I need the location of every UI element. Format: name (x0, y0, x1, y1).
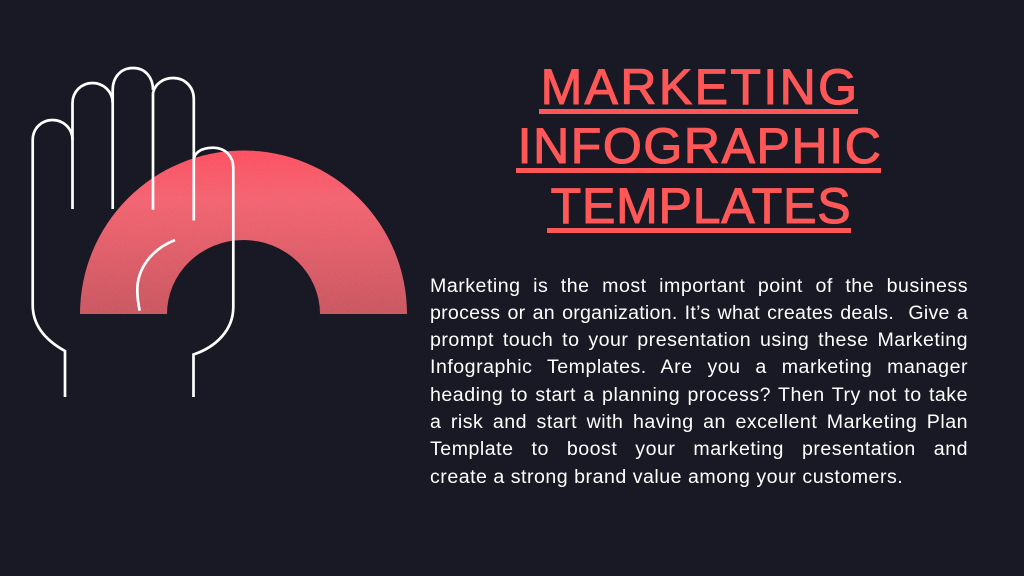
body text: create a strong brand value among your customers. (430, 466, 903, 488)
index finger (153, 78, 194, 220)
title: INFOGRAPHIC (518, 118, 882, 174)
body text: a risk and start with having an excellent Marketing Plan (430, 411, 968, 433)
body text: prompt touch to your presentation using these Marketing (430, 329, 968, 351)
body text: Infographic Templates. Are you a marketing manager (430, 356, 968, 378)
body text: heading to start a planning process? Then Try not to take (430, 384, 968, 406)
title: MARKETING (541, 59, 859, 115)
thumb and palm right side (194, 148, 233, 397)
pinky and palm left side (33, 120, 72, 397)
body text: Marketing is the most important point of the business (430, 274, 968, 296)
palm crease (137, 240, 175, 311)
body text: Template to boost your marketing presentation and (430, 438, 968, 460)
ring finger (72, 83, 113, 209)
middle finger (113, 68, 153, 209)
body text: process or an organization. It’s what creates deals. Give a (430, 302, 968, 324)
title (516, 59, 882, 234)
body text (430, 274, 968, 488)
title: TEMPLATES (551, 178, 851, 234)
arch (80, 150, 407, 314)
icon: hand outline (33, 68, 233, 397)
